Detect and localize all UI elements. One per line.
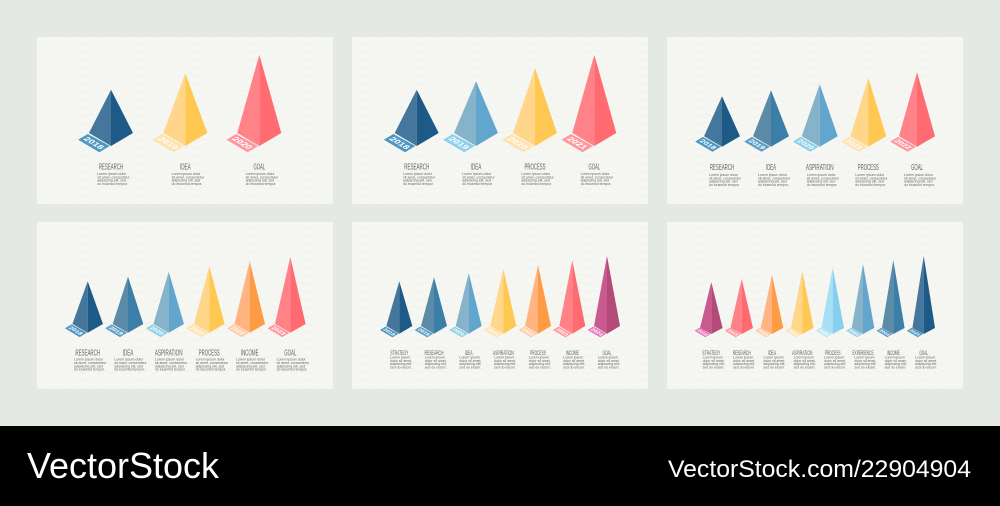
pyramid: 2021 process: sit amet, consectetur	[196, 361, 229, 365]
pyramid: 2025 goal: dolor sit amet,	[915, 359, 937, 363]
pyramid: 2023 income: Lorem ipsum	[563, 356, 583, 360]
pyramid: 2019 idea: do eiusmod tempor.	[114, 368, 145, 372]
pyramid: 2018 research	[78, 90, 133, 186]
pyramid: 2020 goal: 2020	[229, 136, 255, 151]
pyramid: 2022 process: 2022	[521, 328, 536, 337]
pyramid: 2020 aspiration: do eiusmod tempor.	[807, 183, 837, 187]
pyramid: 2021 aspiration: 2021	[787, 328, 801, 337]
panel: three-step pyramids	[37, 37, 333, 204]
pyramid: 2021 aspiration: dolor sit amet,	[794, 359, 816, 363]
pyramid: 2020 idea: sed do eiusm.	[459, 366, 481, 370]
pyramid: 2018 strategy: Lorem ipsum	[390, 356, 410, 360]
pyramid: 2018 research: Lorem ipsum dolor	[709, 173, 739, 177]
pyramid: 2022 process: PROCESS	[825, 350, 841, 357]
pyramid: 2018 research: do eiusmod tempor.	[403, 182, 434, 186]
pyramid: 2018 strategy: STRATEGY	[702, 350, 721, 357]
pyramid: 2024 income: INCOME	[887, 350, 900, 357]
pyramid: 2024 goal: GOAL	[603, 350, 611, 357]
pyramid: 2019 idea: do eiusmod tempor.	[758, 183, 789, 187]
pyramid: 2020 goal: Lorem ipsum dolor	[246, 172, 275, 176]
pyramid: 2025 goal: GOAL	[919, 350, 928, 357]
pyramid: 2021 process: PROCESS	[199, 348, 220, 357]
pyramid: 2018 research: sit amet, consectetur	[403, 175, 436, 179]
pyramid: 2024 income: 2024	[878, 328, 892, 337]
pyramid: 2022 process: adipiscing elit,	[529, 362, 551, 366]
pyramid: 2022 goal: Lorem ipsum dolor	[904, 173, 934, 177]
pyramid: 2018 research: RESEARCH	[75, 348, 100, 357]
pyramid: 2020 idea: 2020	[451, 328, 466, 337]
pyramid: 2022 goal	[890, 72, 937, 187]
pyramid: 2019 idea: sit amet, consectetur	[114, 361, 147, 365]
pyramid: 2023 goal: adipiscing elit, sed	[277, 364, 305, 368]
pyramid: 2019 idea: Lorem ipsum dolor	[172, 172, 201, 176]
pyramid: 2020 goal	[226, 55, 281, 186]
pyramid: 2019 research: RESEARCH	[733, 350, 751, 357]
pyramid: 2020 aspiration: sit amet, consectetur	[807, 176, 840, 180]
pyramid: 2020 process: Lorem ipsum dolor	[521, 172, 551, 176]
pyramid: 2018 strategy: adipiscing elit,	[703, 362, 725, 366]
pyramid: 2020 process: PROCESS	[524, 162, 546, 171]
pyramid: 2023 goal: 2023	[269, 326, 286, 336]
pyramid: 2021 goal: Lorem ipsum dolor	[581, 172, 610, 176]
pyramid: 2021 aspiration: Lorem ipsum	[794, 356, 814, 360]
pyramid: 2021 aspiration	[786, 271, 816, 370]
pyramid: 2020 process: do eiusmod tempor.	[521, 182, 552, 186]
pyramid: 2019 idea: IDEA	[471, 162, 482, 171]
pyramid: 2024 income: Lorem ipsum	[885, 356, 905, 360]
pyramid: 2022 process: Lorem ipsum	[529, 356, 549, 360]
pyramid: 2025 goal	[907, 256, 937, 370]
pyramid: 2021 goal: sit amet, consectetur	[581, 175, 614, 179]
pyramid: 2022 income: do eiusmod tempor.	[236, 368, 267, 372]
pyramid: 2023 goal	[268, 257, 310, 372]
pyramid: 2023 experience: dolor sit amet,	[854, 359, 876, 363]
pyramid: 2022 income: Lorem ipsum dolor	[236, 358, 266, 362]
panel: seven-step pyramids	[352, 222, 648, 389]
pyramid: 2020 goal: GOAL	[253, 162, 265, 171]
pyramid: 2022 goal: sit amet, consectetur	[904, 176, 937, 180]
pyramid: 2021 process	[842, 78, 888, 187]
pyramid: 2018 strategy: Lorem ipsum	[703, 356, 723, 360]
pyramid: 2018 research: sit amet, consectetur	[74, 361, 107, 365]
pyramid: 2022 process: sed do eiusm.	[824, 366, 846, 370]
pyramid: 2020 goal: adipiscing elit, sed	[246, 179, 274, 183]
pyramid: 2019 idea: adipiscing elit, sed	[172, 179, 200, 183]
pyramid: 2018 strategy	[380, 281, 412, 370]
pyramid: 2021 aspiration: sed do eiusm.	[494, 366, 516, 370]
pyramid: 2023 goal: sit amet, consectetur	[277, 361, 310, 365]
pyramid: 2019 research: Lorem ipsum	[733, 356, 753, 360]
pyramid: 2019 research	[725, 279, 755, 370]
pyramid: 2018 research: RESEARCH	[710, 163, 734, 172]
pyramid: 2023 goal: GOAL	[284, 348, 297, 357]
pyramid: 2020 aspiration	[793, 84, 840, 187]
pyramid: 2020 idea: adipiscing elit,	[459, 362, 481, 366]
pyramid: 2020 aspiration: adipiscing elit, sed	[155, 364, 184, 368]
pyramid: 2022 income: adipiscing elit, sed	[236, 364, 265, 368]
panel: six-step pyramids	[37, 222, 333, 389]
pyramid: 2018 research: 2018	[66, 326, 84, 336]
pyramid: 2019 idea	[744, 90, 791, 187]
pyramid: 2018 research: Lorem ipsum dolor	[97, 172, 127, 176]
pyramid: 2024 income: dolor sit amet,	[885, 359, 907, 363]
pyramid: 2021 process: do eiusmod tempor.	[855, 183, 886, 187]
pyramid: 2022 process: 2022	[817, 328, 831, 337]
pyramid: 2021 process: sit amet, consectetur	[855, 176, 888, 180]
pyramid: 2024 goal: sed do eiusm.	[598, 366, 620, 370]
pyramid: 2022 income: 2022	[228, 326, 246, 336]
panel: five-step pyramids	[667, 37, 963, 204]
pyramid: 2021 aspiration: dolor sit amet,	[494, 359, 516, 363]
pyramid: 2019 idea: 2019	[446, 136, 472, 151]
pyramid: 2018 research: do eiusmod tempor.	[74, 368, 105, 372]
pyramid: 2020 idea: IDEA	[768, 350, 776, 357]
panel: eight-step pyramids	[667, 222, 963, 389]
pyramid: 2018 research: 2018	[387, 136, 413, 151]
pyramid: 2023 income: 2023	[555, 328, 570, 337]
pyramid: 2018 research: adipiscing elit, sed	[74, 364, 103, 368]
pyramid: 2019 idea: 2019	[107, 326, 124, 336]
pyramid: 2019 idea: Lorem ipsum dolor	[114, 358, 144, 362]
pyramid: 2019 research	[415, 277, 447, 370]
pyramid: 2020 idea: dolor sit amet,	[459, 359, 481, 363]
pyramid: 2023 income: adipiscing elit,	[563, 362, 585, 366]
pyramid: 2018 research: sit amet, consectetur	[709, 176, 742, 180]
pyramid: 2018 research: do eiusmod tempor.	[709, 183, 740, 187]
pyramid: 2018 strategy: 2018	[382, 328, 397, 337]
pyramid: 2024 goal: dolor sit amet,	[598, 359, 620, 363]
pyramid: 2021 process	[186, 266, 229, 372]
pyramid: 2021 goal: adipiscing elit, sed	[581, 179, 609, 183]
pyramid: 2021 aspiration: Lorem ipsum	[494, 356, 514, 360]
pyramid: 2022 income: INCOME	[241, 348, 259, 357]
pyramid: 2020 idea: Lorem ipsum	[459, 356, 480, 360]
pyramid: 2020 idea: IDEA	[465, 350, 473, 357]
pyramid: 2019 idea: Lorem ipsum dolor	[462, 172, 492, 176]
pyramid: 2022 process: PROCESS	[530, 350, 546, 357]
pyramid: 2019 research: RESEARCH	[424, 350, 444, 357]
pyramid: 2021 process: adipiscing elit, sed	[196, 364, 224, 368]
pyramid: 2019 research: adipiscing elit,	[733, 362, 755, 366]
pyramid: 2020 aspiration: do eiusmod tempor.	[155, 368, 186, 372]
pyramid: 2025 goal: adipiscing elit,	[915, 362, 937, 366]
pyramid: 2023 experience: Lorem ipsum	[854, 356, 875, 360]
pyramid: 2019 idea: sit amet, consectetur	[758, 176, 791, 180]
pyramid: 2018 strategy: dolor sit amet,	[703, 359, 725, 363]
pyramid: 2022 income	[227, 261, 269, 372]
pyramid: 2022 process	[816, 268, 846, 370]
pyramid: 2018 research: RESEARCH	[404, 162, 429, 171]
pyramid: 2020 goal: do eiusmod tempor.	[246, 182, 276, 186]
pyramid: 2018 research: sit amet, consectetur	[97, 175, 130, 179]
pyramid: 2018 research: 2018	[697, 138, 718, 151]
pyramid: 2018 research: Lorem ipsum dolor	[403, 172, 433, 176]
pyramid: 2024 income	[876, 260, 907, 370]
pyramid: 2022 process	[519, 265, 551, 370]
pyramid: 2019 idea: adipiscing elit, sed	[114, 364, 143, 368]
pyramid: 2018 strategy	[694, 282, 725, 370]
pyramid: 2024 income: adipiscing elit,	[885, 362, 907, 366]
pyramid: 2019 idea: adipiscing elit, sed	[462, 179, 491, 183]
footer logo: VectorStock	[27, 445, 220, 486]
pyramid: 2022 income: sit amet, consectetur	[236, 361, 269, 365]
footer bar	[0, 426, 1000, 506]
pyramid: 2018 research: Lorem ipsum dolor	[74, 358, 104, 362]
pyramid: 2020 process: 2020	[505, 136, 531, 151]
pyramid: 2019 idea: 2019	[746, 138, 767, 151]
pyramid: 2021 aspiration: adipiscing elit,	[494, 362, 516, 366]
pyramid: 2022 process: dolor sit amet,	[529, 359, 551, 363]
pyramid: 2019 research: dolor sit amet,	[425, 359, 447, 363]
pyramid: 2023 experience: adipiscing elit,	[854, 362, 876, 366]
pyramid: 2023 income: dolor sit amet,	[563, 359, 585, 363]
pyramid: 2024 goal: Lorem ipsum	[598, 356, 618, 360]
pyramid: 2018 strategy: sed do eiusm.	[390, 366, 412, 370]
pyramid: 2021 process: 2021	[188, 326, 205, 336]
pyramid: 2021 aspiration: adipiscing elit,	[794, 362, 816, 366]
pyramid: 2023 experience: 2023	[848, 328, 862, 337]
pyramid: 2018 research: adipiscing elit, sed	[709, 180, 738, 184]
pyramid: 2021 process: Lorem ipsum dolor	[196, 358, 225, 362]
pyramid: 2023 experience: EXPERIENCE	[852, 350, 874, 357]
pyramid: 2023 goal: Lorem ipsum dolor	[277, 358, 306, 362]
pyramid: 2018 strategy: dolor sit amet,	[390, 359, 412, 363]
pyramid: 2020 aspiration: adipiscing elit, sed	[807, 180, 835, 184]
panel: four-step pyramids	[352, 37, 648, 204]
pyramid: 2022 process: adipiscing elit,	[824, 362, 846, 366]
pyramid: 2018 strategy: 2018	[696, 328, 710, 337]
pyramid: 2021 aspiration: ASPIRATION	[792, 350, 812, 357]
pyramid: 2019 idea: do eiusmod tempor.	[172, 182, 202, 186]
pyramid: 2019 research: sed do eiusm.	[733, 366, 755, 370]
pyramid: 2020 idea	[755, 275, 785, 370]
pyramid: 2020 aspiration: 2020	[795, 138, 816, 151]
pyramid: 2020 aspiration: Lorem ipsum dolor	[807, 173, 837, 177]
pyramid: 2025 goal: Lorem ipsum	[915, 356, 935, 360]
pyramid: 2019 idea: do eiusmod tempor.	[462, 182, 493, 186]
pyramid: 2019 research: adipiscing elit,	[425, 362, 447, 366]
pyramid: 2020 idea: Lorem ipsum	[763, 356, 784, 360]
pyramid: 2019 idea	[152, 73, 207, 186]
pyramid: 2020 aspiration: sit amet, consectetur	[155, 361, 188, 365]
pyramid: 2019 idea	[443, 81, 498, 186]
pyramid: 2020 idea: 2020	[757, 328, 771, 337]
pyramid: 2021 aspiration: sed do eiusm.	[794, 366, 815, 370]
pyramid: 2019 idea: sit amet, consectetur	[462, 175, 495, 179]
pyramid: 2019 idea: Lorem ipsum dolor	[758, 173, 788, 177]
pyramid: 2020 idea: adipiscing elit,	[763, 362, 785, 366]
pyramid: 2021 process: do eiusmod tempor.	[196, 368, 226, 372]
pyramid: 2019 idea: sit amet, consectetur	[172, 175, 205, 179]
pyramid: 2023 experience: sed do eiusm.	[854, 366, 876, 370]
pyramid: 2019 idea: IDEA	[180, 162, 191, 171]
pyramid: 2021 process: adipiscing elit, sed	[855, 180, 884, 184]
pyramid: 2018 research: adipiscing elit, sed	[97, 179, 126, 183]
footer image id: VectorStock.com/22904904	[668, 456, 971, 483]
pyramid: 2021 process: 2021	[844, 138, 864, 151]
pyramid: 2023 experience	[846, 264, 876, 370]
pyramid: 2020 process	[502, 68, 557, 186]
pyramid: 2022 process: sed do eiusm.	[529, 366, 551, 370]
pyramid: 2022 goal: do eiusmod tempor.	[904, 183, 935, 187]
pyramid: 2019 idea: 2019	[155, 136, 181, 151]
pyramid: 2022 goal: adipiscing elit, sed	[904, 180, 933, 184]
pyramid: 2020 idea: dolor sit amet,	[763, 359, 785, 363]
pyramid: 2022 goal: GOAL	[911, 163, 923, 172]
pyramid: 2019 idea: IDEA	[766, 163, 776, 172]
pyramid: 2020 process: adipiscing elit, sed	[521, 179, 550, 183]
pyramid: 2020 idea: sed do eiusm.	[763, 366, 785, 370]
pyramid: 2019 idea: IDEA	[123, 348, 134, 357]
pyramid: 2021 process: Lorem ipsum dolor	[855, 173, 885, 177]
pyramid: 2021 goal: do eiusmod tempor.	[581, 182, 611, 186]
pyramid: 2021 goal	[562, 55, 616, 186]
pyramid: 2019 idea: adipiscing elit, sed	[758, 180, 787, 184]
pyramid: 2020 process: sit amet, consectetur	[521, 175, 554, 179]
pyramid: 2018 strategy: adipiscing elit,	[390, 362, 412, 366]
pyramid: 2024 goal: adipiscing elit,	[598, 362, 620, 366]
pyramid: 2021 goal: 2021	[564, 136, 590, 151]
pyramid: 2020 idea	[449, 273, 482, 370]
pyramid: 2022 process: Lorem ipsum	[824, 356, 844, 360]
pyramid: 2024 goal	[588, 256, 620, 370]
pyramid: 2018 strategy: sed do eiusm.	[703, 366, 724, 370]
pyramid: 2022 process: dolor sit amet,	[824, 359, 846, 363]
pyramid: 2020 aspiration: ASPIRATION	[155, 348, 183, 357]
pyramid: 2020 aspiration: ASPIRATION	[806, 163, 834, 172]
pyramid: 2023 income: sed do eiusm.	[563, 366, 585, 370]
pyramid: 2023 income	[553, 260, 585, 370]
pyramid: 2018 research	[384, 90, 439, 186]
pyramid: 2018 research: do eiusmod tempor.	[97, 182, 128, 186]
pyramid: 2020 aspiration: 2020	[147, 326, 165, 336]
pyramid: 2019 research: dolor sit amet,	[733, 359, 755, 363]
pyramid: 2019 idea	[105, 277, 147, 372]
pyramid: 2021 process: PROCESS	[858, 163, 879, 172]
pyramid: 2024 income: sed do eiusm.	[885, 366, 906, 370]
pyramid: 2019 research: sed do eiusm.	[425, 366, 447, 370]
pyramid: 2019 research: 2019	[726, 328, 740, 337]
pyramid: 2019 research: 2019	[417, 328, 432, 337]
pyramid: 2018 research	[65, 281, 107, 372]
pyramid: 2020 aspiration	[146, 272, 188, 372]
pyramid: 2023 income: INCOME	[566, 350, 579, 357]
pyramid: 2019 research: Lorem ipsum	[425, 356, 445, 360]
pyramid: 2018 research: adipiscing elit, sed	[403, 179, 432, 183]
pyramid: 2018 research	[695, 96, 742, 187]
pyramid: 2018 research: 2018	[81, 136, 107, 151]
pyramid: 2021 aspiration	[484, 269, 516, 370]
pyramid: 2020 aspiration: Lorem ipsum dolor	[155, 358, 185, 362]
pyramid: 2022 goal: 2022	[892, 138, 913, 151]
pyramid: 2018 strategy: STRATEGY	[390, 350, 409, 357]
pyramid: 2025 goal: 2025	[908, 328, 922, 337]
pyramid: 2024 goal: 2024	[590, 328, 605, 337]
pyramid: 2021 goal: GOAL	[588, 162, 600, 171]
pyramid: 2025 goal: sed do eiusm.	[915, 366, 937, 370]
pyramid: 2020 goal: sit amet, consectetur	[246, 175, 279, 179]
pyramid: 2021 aspiration: 2021	[486, 328, 501, 337]
pyramid: 2023 goal: do eiusmod tempor.	[277, 368, 307, 372]
pyramid: 2021 aspiration: ASPIRATION	[493, 350, 514, 357]
pyramid: 2018 research: RESEARCH	[99, 162, 123, 171]
